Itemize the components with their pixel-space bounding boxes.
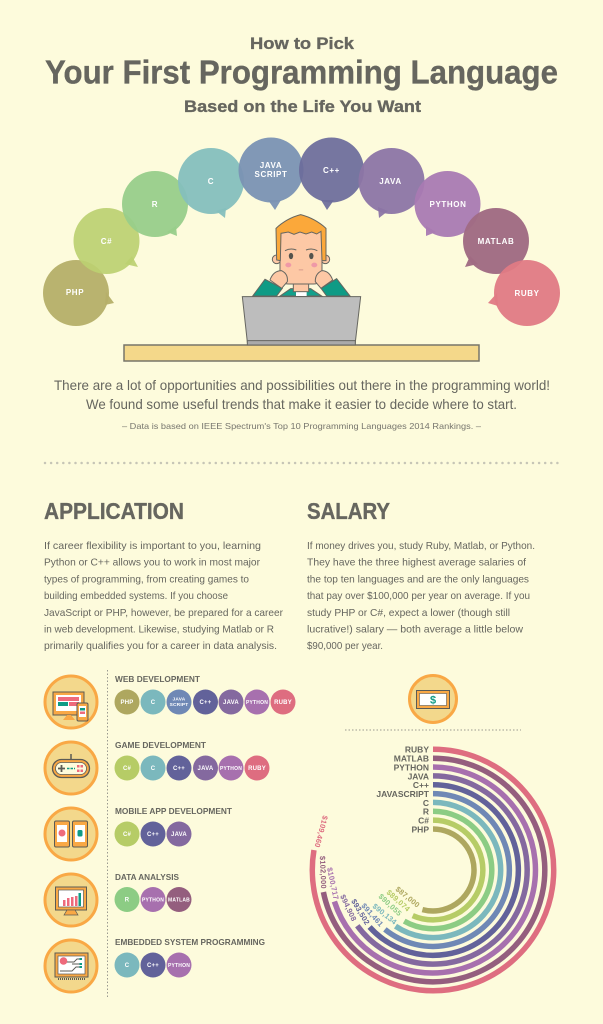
heading: application: APPLICATION xyxy=(44,498,184,524)
badges: JAVA xyxy=(223,700,239,706)
chart salary values: $94,908 xyxy=(338,893,358,923)
badges: C xyxy=(151,700,156,706)
badges: C++ xyxy=(200,700,212,706)
bubble: Ruby: RUBY xyxy=(514,289,540,298)
bubble: C xyxy=(178,148,244,218)
chart salary values: $102,000 xyxy=(318,856,328,889)
text block: salary xyxy=(307,540,535,652)
icon: circuit board xyxy=(45,940,97,992)
laptop xyxy=(242,297,361,345)
badges: JAVA xyxy=(173,696,186,702)
bubble: C#: C# xyxy=(101,237,112,246)
row: embedded system programming xyxy=(45,937,265,992)
chart salary values: $87,000 xyxy=(394,885,422,909)
bubble: JavaScript: SCRIPT xyxy=(255,170,287,179)
chart salary values: $90,134 xyxy=(371,902,399,927)
data source note: – Data is based on IEEE Spectrum's Top 10 Programming Languages 2014 Rankings. – xyxy=(122,421,481,431)
badges: PYTHON xyxy=(142,898,164,904)
eyebrows xyxy=(285,249,317,251)
badges: JAVA xyxy=(171,832,187,838)
row: data analysis xyxy=(45,872,192,926)
text block: application: If career flexibility is important to you, learning xyxy=(44,540,261,552)
heading: salary: SALARY xyxy=(307,498,390,524)
chart language labels: JAVA xyxy=(408,771,429,781)
heading: EMBEDDED SYSTEM PROGRAMMING xyxy=(115,937,265,947)
badges xyxy=(114,756,270,780)
bubble: PHP: PHP xyxy=(66,288,84,297)
illustration: programmer at laptop xyxy=(242,215,361,345)
heading: GAME DEVELOPMENT xyxy=(115,740,207,750)
chart salary values: $100,717 xyxy=(325,867,341,901)
row: game development xyxy=(45,740,270,794)
intro text: There are a lot of opportunities and possibilities out there in the programming world! xyxy=(54,377,550,393)
table xyxy=(124,345,479,361)
hands xyxy=(270,271,333,288)
badges: SCRIPT xyxy=(170,702,188,708)
chart salary values: $109,460 xyxy=(313,814,330,849)
chart language labels: MATLAB xyxy=(394,754,429,764)
bubble: Matlab: MATLAB xyxy=(478,237,514,246)
badges: PYTHON xyxy=(246,700,268,706)
icon: monitor and phone xyxy=(45,676,97,728)
icon: two phones xyxy=(45,808,97,860)
speech bubbles: languages xyxy=(43,138,560,326)
title: Based on the Life You Want xyxy=(184,97,421,116)
text block: application: primarily qualifies you for a career in data analysis. xyxy=(44,640,277,652)
chart language labels: C# xyxy=(418,816,429,826)
bubble: C++ xyxy=(299,138,364,210)
bubble: Java xyxy=(358,148,424,218)
title: Your First Programming Language xyxy=(45,54,558,90)
text block: salary: They have the three highest average salaries of xyxy=(307,557,526,569)
bubble: R: R xyxy=(152,200,158,209)
text block: application: JavaScript or PHP, however, be prepared for a career xyxy=(44,607,283,619)
bubble: C# xyxy=(74,208,140,274)
text block: salary: If money drives you, study Ruby, Matlab, or Python. xyxy=(307,540,535,552)
row: web development xyxy=(45,674,296,728)
head xyxy=(280,232,322,284)
chart language labels: C++ xyxy=(413,780,429,790)
badges: C++ xyxy=(147,832,159,838)
badges: MATLAB xyxy=(168,898,190,904)
intro text xyxy=(54,377,550,412)
heading: MOBILE APP DEVELOPMENT xyxy=(115,806,233,816)
face details xyxy=(285,253,317,270)
badges: C++ xyxy=(173,766,185,772)
bubble: Matlab xyxy=(463,208,529,274)
icon: dollar bill xyxy=(410,676,456,722)
chart salary values: $91,461 xyxy=(360,901,385,929)
chart salary values: $90,055 xyxy=(377,892,404,918)
chart language labels: RUBY xyxy=(405,745,429,755)
neck xyxy=(293,282,309,292)
badges: C++ xyxy=(147,963,159,969)
text block: salary: the top ten languages and are the only languages xyxy=(307,573,529,585)
chart language labels xyxy=(376,745,430,834)
jacket xyxy=(253,279,350,296)
text block: salary: that pay over $100,000 per year on average. If you xyxy=(307,590,530,602)
badges: PHP xyxy=(121,700,133,706)
title xyxy=(45,34,558,116)
bubble: JavaScript: JAVA xyxy=(260,161,282,170)
badges xyxy=(114,887,192,912)
chart language labels: C xyxy=(423,798,429,808)
bubble: Java: JAVA xyxy=(379,177,402,186)
hair xyxy=(276,215,326,261)
bubble: C: C xyxy=(208,177,214,186)
bubble: R xyxy=(122,171,188,237)
intro text: We found some useful trends that make it easier to decide where to start. xyxy=(86,396,517,412)
icon: chart monitor xyxy=(45,874,97,926)
text block: salary: lucrative!) salary — both average a little below xyxy=(307,624,523,636)
badges: PYTHON xyxy=(220,766,242,772)
chart salary values: $93,502 xyxy=(349,897,372,926)
text block: salary: study PHP or C#, expect a lower (though still xyxy=(307,607,510,619)
chart language labels: JAVASCRIPT xyxy=(376,789,430,799)
badges xyxy=(114,822,192,846)
row: mobile app development xyxy=(45,806,233,860)
bubble: Ruby xyxy=(488,260,560,326)
text block: application: Python or C++ allows you to work in most major xyxy=(44,557,260,569)
chart language labels: PYTHON xyxy=(394,762,429,772)
chart language labels: PHP xyxy=(412,824,429,834)
chart salary values: $89,074 xyxy=(385,888,412,914)
chart arcs xyxy=(312,749,554,991)
badges: C# xyxy=(123,766,131,772)
heading: DATA ANALYSIS xyxy=(115,872,179,882)
text block: application: in web development. Likewise, studying Matlab or R xyxy=(44,624,274,636)
radial bar chart: salaries xyxy=(312,745,554,991)
badges: C xyxy=(151,766,156,772)
badges: R xyxy=(125,898,130,904)
bubble: C++: C++ xyxy=(323,166,340,175)
bubble: Python: PYTHON xyxy=(430,200,466,209)
badges: JAVA xyxy=(198,766,214,772)
bubble: PHP xyxy=(43,260,114,326)
text block: application: types of programming, from creating games to xyxy=(44,573,249,585)
badges: RUBY xyxy=(274,700,292,706)
badges xyxy=(114,690,296,714)
badges: RUBY xyxy=(248,766,266,772)
text block: application: building embedded systems. If you choose xyxy=(44,590,228,602)
badges xyxy=(114,952,192,978)
bubble: JavaScript xyxy=(238,138,304,210)
badges: C# xyxy=(123,832,131,838)
ears xyxy=(272,255,330,264)
icon: game controller xyxy=(45,742,97,794)
badges: C xyxy=(125,963,130,969)
title: How to Pick xyxy=(250,34,355,53)
heading: WEB DEVELOPMENT xyxy=(115,674,201,684)
badges: PYTHON xyxy=(168,963,190,969)
chart language labels: R xyxy=(423,807,429,817)
text block: salary: $90,000 per year. xyxy=(307,640,383,652)
bubble: Python xyxy=(414,171,480,237)
chart salary values xyxy=(313,814,422,929)
text block: application xyxy=(44,540,283,652)
icon: dollar bill: $ xyxy=(430,694,436,706)
